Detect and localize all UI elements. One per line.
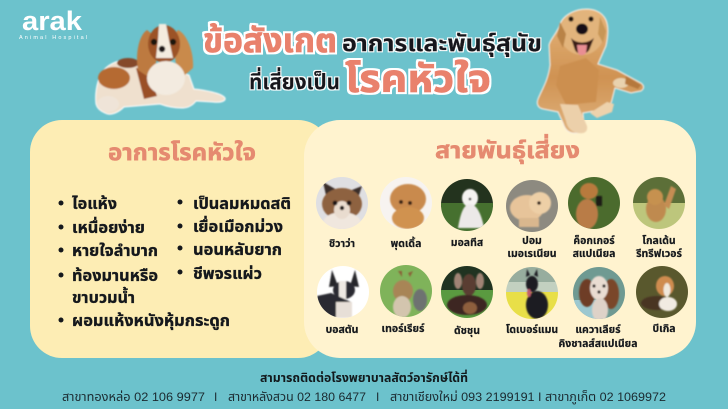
breed: beagle xyxy=(636,266,688,335)
symptom list: นอนหลับยาก xyxy=(193,242,282,259)
symptom list: เหนื่อยง่าย xyxy=(72,216,145,237)
breed: beagle: บีเกิล xyxy=(652,323,676,335)
title: symptoms and dog breeds: อาการและพันธุ์สุนัข xyxy=(342,30,542,57)
symptom list: ท้องมานหรือ xyxy=(72,267,158,285)
symptom list: ขาบวมน้ำ xyxy=(72,286,135,307)
breed: dachshund xyxy=(441,266,493,337)
branch phone numbers xyxy=(62,390,666,404)
breed: cocker spaniel: ค็อกเกอร์ xyxy=(573,235,615,247)
title: observations: ข้อสังเกต xyxy=(203,22,337,60)
symptom list: หายใจลำบาก xyxy=(72,243,158,260)
symptom list: ชีพจรแผ่ว xyxy=(193,265,262,283)
heading: symptoms: อาการโรคหัวใจ xyxy=(108,139,256,165)
breed: cocker spaniel: สแปเนียล xyxy=(573,248,615,260)
breed: yorkshire terrier xyxy=(380,265,432,335)
image: cavalier spaniel lying down xyxy=(96,24,225,114)
symptom list xyxy=(58,195,291,331)
branch phone numbers: สาขาหลังสวน 02 180 6477 xyxy=(228,390,366,404)
breed: poodle xyxy=(380,177,432,250)
title xyxy=(203,22,542,101)
breed: pomeranian xyxy=(506,180,558,260)
breed: poodle: พุดเดิ้ล xyxy=(391,237,421,250)
image: golden retriever lying down xyxy=(537,9,644,133)
breed: cocker spaniel xyxy=(568,177,620,260)
logo: arak Animal Hospital: arak xyxy=(22,6,83,36)
breed: cavalier king charles spaniel xyxy=(558,267,638,350)
branch phone numbers: I xyxy=(376,390,379,404)
breed: boston terrier: บอสตัน xyxy=(326,324,358,336)
branch phone numbers: I xyxy=(214,390,217,404)
breed: chihuahua xyxy=(316,177,368,250)
branch phone numbers: สาขาทองหล่อ 02 106 9977 xyxy=(62,390,205,404)
breed: boston terrier xyxy=(317,266,369,336)
breed: golden retriever xyxy=(633,177,685,260)
logo: arak Animal Hospital: Animal Hospital xyxy=(19,35,87,41)
title: at risk of: ที่เสี่ยงเป็น xyxy=(249,67,340,94)
symptom list: ไอแห้ง xyxy=(72,195,117,213)
panel: at-risk breeds xyxy=(304,120,696,358)
breed: dobermann: โดเบอร์แมน xyxy=(506,324,558,336)
symptom list: เยื่อเมือกม่วง xyxy=(193,215,283,236)
footer: contact xyxy=(62,369,666,404)
breed: golden retriever: รีทรีฟเวอร์ xyxy=(636,248,682,260)
panel: symptoms xyxy=(30,120,330,358)
breed: pomeranian: ปอม xyxy=(522,235,542,247)
symptom list: ผอมแห้งหนังหุ้มกระดูก xyxy=(72,312,230,331)
footer heading: สามารถติดต่อโรงพยาบาลสัตว์อารักษ์ได้ที่ xyxy=(260,369,468,385)
breed: cavalier king charles spaniel: คิงชาลส์สแปเนียล xyxy=(558,338,638,350)
breed: yorkshire terrier: เทอร์เรียร์ xyxy=(382,323,425,335)
breed: dachshund: ดัชชุน xyxy=(454,325,480,337)
title: heart disease: โรคหัวใจ xyxy=(345,59,491,101)
breed: dobermann xyxy=(506,267,558,336)
breed: pomeranian: เมอเรเนียน xyxy=(507,248,557,260)
breed: chihuahua: ชิวาว่า xyxy=(329,237,355,250)
heading: at-risk breeds: สายพันธุ์เสี่ยง xyxy=(435,134,580,164)
branch phone numbers: สาขาเชียงใหม่ 093 2199191 I สาขาภูเก็ต 02 1069972 xyxy=(390,390,666,404)
breed: golden retriever: โกลเด้น xyxy=(642,234,676,247)
symptom list: เป็นลมหมดสติ xyxy=(193,195,291,213)
breed: maltese xyxy=(441,179,493,249)
breed: cavalier king charles spaniel: แควาเลียร์ xyxy=(575,324,621,336)
breed: maltese: มอลทีส xyxy=(451,237,483,249)
